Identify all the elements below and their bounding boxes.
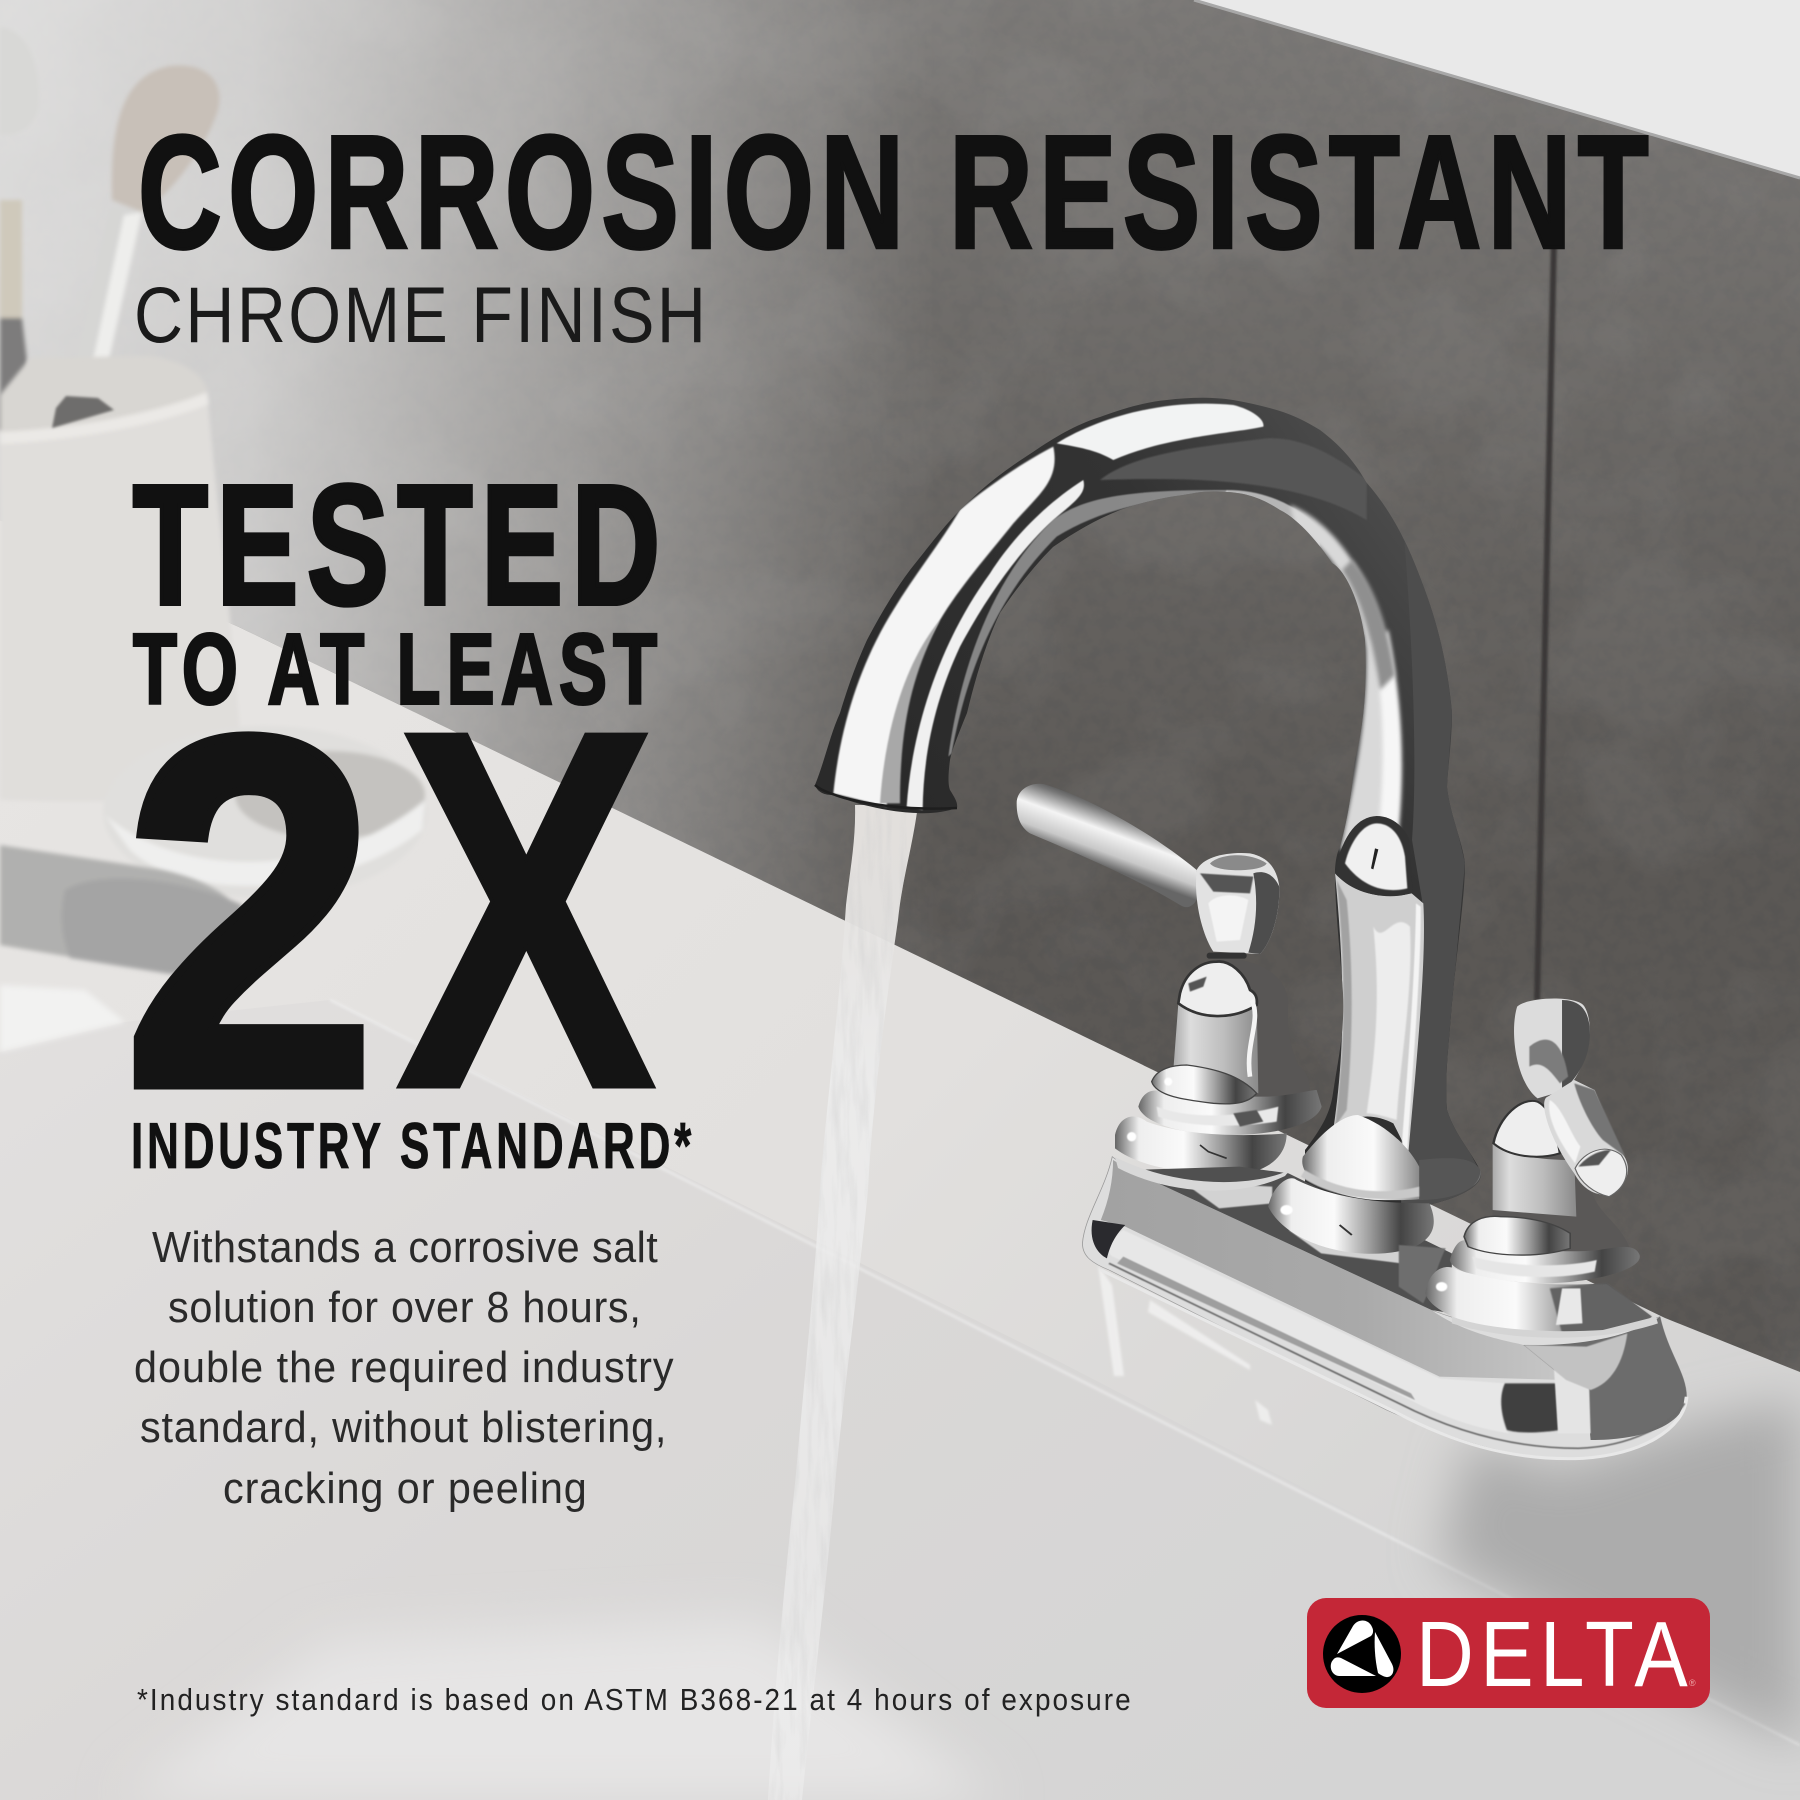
industry standard: INDUSTRY STANDARD*	[131, 1110, 692, 1182]
plate top deck reflections	[1129, 1167, 1452, 1313]
grey lipstick tube	[0, 845, 243, 974]
left upper knob	[1178, 962, 1257, 1016]
plate right dome	[1523, 1317, 1687, 1440]
right lever	[1544, 1080, 1628, 1194]
centre dome	[1268, 1178, 1434, 1254]
faucet shadow on deck	[1440, 1400, 1800, 1745]
flat brush	[68, 65, 219, 400]
stem lower silver section	[1333, 816, 1424, 1153]
left bell dark body	[1173, 958, 1310, 1100]
description text: solution for over 8 hours,	[168, 1283, 641, 1332]
plate bright lower band	[1109, 1230, 1509, 1433]
description text: double the required industry	[134, 1343, 674, 1392]
base plate	[1082, 1157, 1687, 1459]
left cap	[1196, 853, 1279, 954]
plate rim highlight	[1101, 1270, 1687, 1459]
subheading: chrome finish: CHROME FINISH	[134, 270, 706, 359]
basin lip edge	[330, 1000, 1800, 1745]
stat block: tested to at least 2X	[122, 451, 692, 1195]
chrome faucet	[800, 380, 1687, 1459]
left dome	[1115, 1117, 1287, 1173]
left lower knob	[1152, 1065, 1257, 1104]
right upper knob	[1493, 1101, 1560, 1157]
2X: 2	[122, 632, 378, 1191]
right cap	[1514, 999, 1590, 1098]
registered mark: ®	[1689, 1678, 1696, 1688]
right bell dark body	[1493, 1095, 1631, 1253]
plate outline	[1082, 1157, 1687, 1459]
faucet reflection on deck	[1098, 1265, 1272, 1425]
basin	[0, 1000, 1800, 1800]
to at least: TO AT LEAST	[133, 614, 657, 725]
description text: cracking or peeling	[223, 1464, 587, 1513]
right bell silver column	[1493, 1143, 1576, 1217]
spout bands	[833, 404, 1367, 810]
lighter basin floor at bottom	[120, 1620, 1000, 1800]
left top brush head	[0, 27, 39, 135]
left disc	[1138, 1090, 1322, 1135]
bright counter corner at left	[0, 985, 125, 1052]
right dome	[1425, 1267, 1652, 1337]
footnote: *Industry standard is based on ASTM B368-21 at 4 hours of exposure	[137, 1683, 1131, 1717]
marble cup	[0, 356, 243, 802]
plate dark end mark	[1092, 1220, 1125, 1258]
grey stone wall	[0, 0, 1800, 1400]
right disc	[1450, 1240, 1640, 1283]
wordmark: DELTA	[1416, 1602, 1688, 1706]
powder compact	[103, 726, 427, 898]
right lower knob	[1464, 1216, 1570, 1255]
spout tip shadow line	[815, 785, 957, 809]
stem collar	[1335, 816, 1413, 896]
heading: corrosion resistant: CORROSION RESISTANT	[138, 102, 1649, 282]
spout arc and body	[800, 380, 1500, 1220]
2X: X	[396, 625, 658, 1195]
right handle assembly	[1425, 999, 1658, 1338]
centre cone	[1302, 1115, 1481, 1200]
wall tile joint	[1537, 195, 1555, 1000]
left lever	[1017, 784, 1197, 907]
left slim brush	[0, 200, 35, 430]
stem silver band	[1290, 505, 1399, 850]
left handle assembly	[1017, 784, 1322, 1173]
description text: Withstands a corrosive salt	[152, 1223, 658, 1272]
logo mark	[1323, 1615, 1401, 1693]
stem dark reflection column	[1401, 617, 1481, 1204]
2X	[122, 625, 658, 1195]
brush base in cup	[52, 396, 114, 428]
water stream	[768, 805, 917, 1800]
centre spout base	[1268, 1115, 1481, 1303]
description text: standard, without blistering,	[140, 1403, 666, 1452]
left dome lip in front of plate	[1115, 1157, 1290, 1191]
tested: TESTED	[133, 451, 660, 640]
left bell silver column	[1173, 1000, 1258, 1093]
Delta logo	[1307, 1598, 1710, 1708]
description text	[134, 1223, 674, 1513]
plate flat front	[1101, 1160, 1566, 1380]
mirror top right	[1194, 0, 1800, 178]
